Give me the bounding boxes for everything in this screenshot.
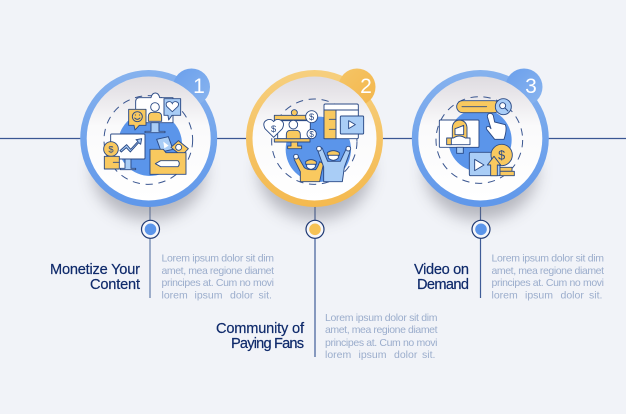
icon: community of paying fans: $ bbox=[309, 130, 314, 139]
panel: step 3 circle bbox=[412, 68, 549, 220]
text block: step 2 description: sit. bbox=[422, 349, 435, 361]
node marker 2 bbox=[306, 220, 324, 238]
shadow bbox=[259, 124, 371, 220]
number badge: 1 bbox=[193, 75, 205, 98]
text block: step 3 description: dolor bbox=[560, 290, 584, 302]
text block: step 3 description: ipsum bbox=[525, 290, 553, 302]
text block: step 2 description: Lorem ipsum dolor sit dim bbox=[325, 312, 438, 324]
text block: step 3 description: sit. bbox=[589, 290, 602, 302]
yellow ring bbox=[246, 70, 383, 207]
heading: Video on Demand: Demand bbox=[417, 277, 469, 293]
panel: step 2 circle bbox=[246, 68, 383, 220]
shadow bbox=[425, 124, 537, 220]
icon: video on demand bbox=[436, 97, 523, 183]
timeline horizontal line bbox=[0, 138, 626, 140]
text block: step 1 description: dolor bbox=[230, 290, 254, 302]
white disc bbox=[418, 76, 542, 200]
icon: monetize content: $ bbox=[108, 144, 114, 154]
text block: step 1 description: amet, mea regione diamet bbox=[162, 265, 274, 277]
text block: step 2 description: ipsum bbox=[358, 349, 387, 361]
text block: step 1 description: principes at. Cum no movi bbox=[162, 277, 274, 289]
number badge bbox=[338, 68, 376, 106]
heading: Community of Paying Fans: Paying Fans bbox=[231, 336, 304, 352]
text block: step 3 description: amet, mea regione diamet bbox=[492, 265, 604, 277]
text block: step 1 description: Lorem ipsum dolor sit dim bbox=[162, 252, 274, 264]
shadow bbox=[93, 124, 205, 220]
text block: step 3 description: principes at. Cum no movi bbox=[492, 277, 604, 289]
text block: step 3 description: Lorem ipsum dolor sit dim bbox=[492, 252, 604, 264]
blue ring bbox=[80, 70, 217, 207]
step 3 vertical connector bbox=[480, 205, 482, 298]
number badge: 2 bbox=[360, 75, 372, 98]
icon: video on demand: $ bbox=[498, 148, 505, 162]
step 2 vertical connector bbox=[314, 205, 316, 357]
node marker 3 bbox=[472, 220, 490, 238]
text block: step 1 description: lorem bbox=[162, 290, 188, 302]
number badge: 3 bbox=[525, 75, 537, 98]
step 1 vertical connector bbox=[149, 205, 151, 298]
icon: monetize content bbox=[104, 93, 193, 184]
white disc bbox=[87, 76, 211, 200]
number badge bbox=[173, 68, 210, 106]
node marker 1 bbox=[142, 220, 160, 238]
blue ring bbox=[412, 70, 549, 207]
icon: community of paying fans: $ bbox=[271, 124, 277, 134]
text block: step 2 description: dolor bbox=[394, 349, 418, 361]
number badge bbox=[506, 68, 542, 106]
panel: step 1 circle bbox=[80, 68, 217, 220]
icon: community of paying fans bbox=[264, 99, 364, 184]
text block: step 2 description: lorem bbox=[325, 349, 352, 361]
heading: Monetize Your Content: Content bbox=[90, 277, 140, 293]
heading: Video on Demand: Video on bbox=[414, 262, 469, 278]
text block: step 1 description: ipsum bbox=[194, 290, 223, 302]
text block: step 3 description: lorem bbox=[492, 290, 518, 302]
icon: community of paying fans: $ bbox=[309, 112, 315, 122]
white disc bbox=[252, 76, 376, 200]
text block: step 1 description: sit. bbox=[258, 290, 272, 302]
text block: step 2 description: amet, mea regione diamet bbox=[325, 324, 438, 336]
heading: Monetize Your Content: Monetize Your bbox=[50, 262, 140, 278]
heading: Community of Paying Fans: Community of bbox=[216, 321, 305, 337]
text block: step 2 description: principes at. Cum no movi bbox=[325, 337, 438, 349]
